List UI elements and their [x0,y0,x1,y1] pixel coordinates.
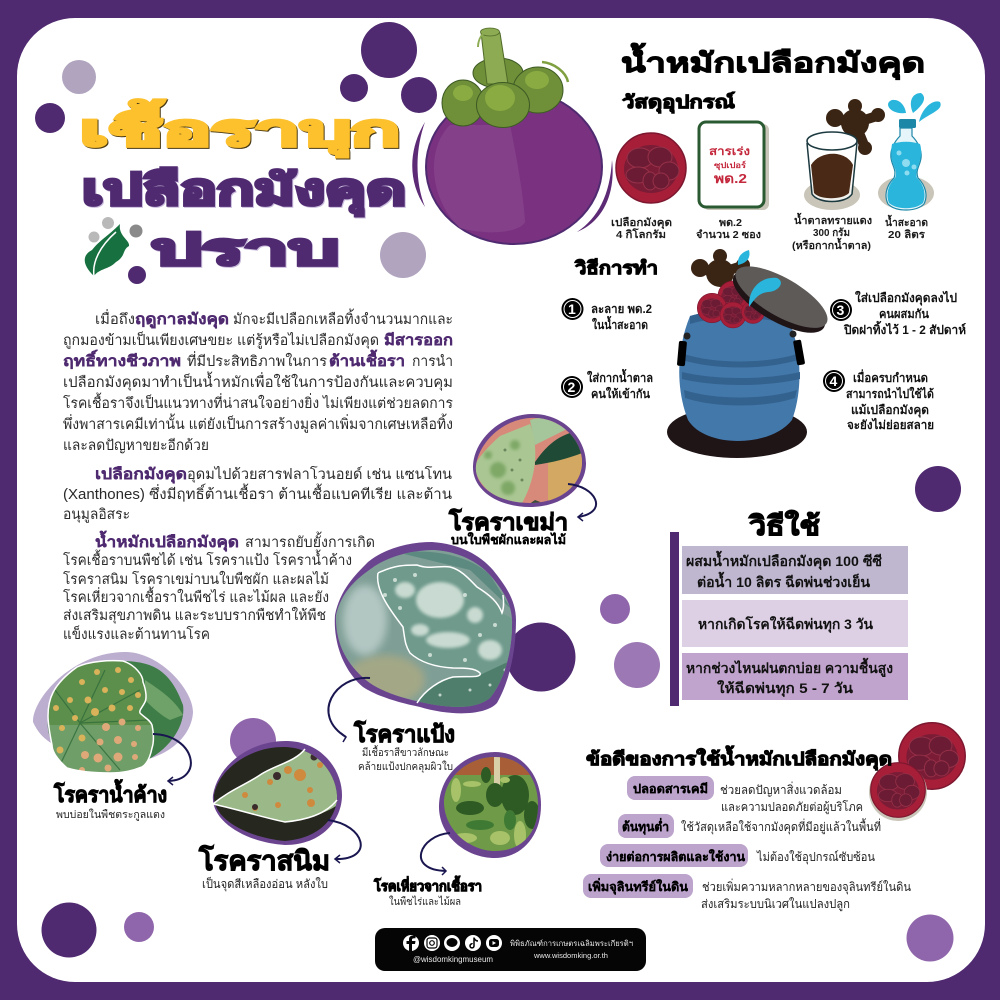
material: mangosteen peel: เปลือกมังคุด [611,216,672,230]
material: PD2 packet: สารเร่ง [709,146,750,158]
disease: powdery mildew: โรคราแป้ง [353,720,455,747]
benefit 4: เพิ่มจุลินทรีย์ในดิน [588,878,688,895]
step 4: 4 [830,373,838,389]
step 3: ปิดฝาทิ้งไว้ 1 - 2 สัปดาห์ [843,320,966,337]
text block: intro paragraph: และลดปัญหาขยะอีกด้วย [63,437,209,454]
usage row 1 [682,546,908,594]
text block: intro paragraph: มักจะมีเปลือกเหลือทิ้งจำนวนมากและ [233,308,453,328]
benefit 1: และความปลอดภัยต่อผู้บริโภค [721,800,863,815]
step 4: แม้เปลือกมังคุด [851,403,929,418]
text block: fermented extract paragraph: สามารถยับยั้งการเกิด [245,531,375,551]
icon: mangosteen fruit [412,28,613,245]
text block: xanthones paragraph: (Xanthones) ซึ่งมีฤทธิ์ต้านเชื้อรา ต้านเชื้อแบคทีเรีย และต้าน [63,483,452,503]
material: mangosteen peel: 4 กิโลกรัม [616,228,666,241]
text block: fermented extract paragraph: โรคราสนิม โรคราเขม่าบนใบพืชผัก และผลไม้ [63,570,329,588]
step 3: คนผสมกัน [879,307,930,321]
disease: sooty mold: บนใบพืชผักและผลไม้ [451,532,566,547]
step 1: ละลาย พด.2 [591,302,652,316]
text block: fermented extract paragraph: ส่งเสริมสุขภาพดิน และระบบรากพืชทำให้พืช [63,606,326,624]
text block: intro paragraph: มีสารออก [384,332,453,349]
social icons [403,935,502,951]
footer bar [375,928,646,971]
material: brown sugar glass: 300 กรัม [813,227,850,239]
text block: intro paragraph: พึ่งพาสารเคมีเท่านั้น แต่ยังเป็นการสร้างมูลค่าเพิ่มจากเศษเหลือทิ้ง [63,413,453,433]
icon: fermentation barrel [667,249,836,458]
text block: fermented extract paragraph [63,530,375,643]
disease: rust: โรคราสนิม [198,844,330,876]
title: ปราบ [151,226,339,273]
panel: how to use [670,510,908,706]
benefit 1 [627,776,863,815]
text block: xanthones paragraph: เปลือกมังคุด [95,466,187,484]
disease: downy mildew: พบบ่อยในพืชตระกูลแตง [56,808,165,821]
usage row 1: ผสมน้ำหมักเปลือกมังคุด 100 ซีซี [686,550,883,570]
disease: powdery mildew: มีเชื้อราสีขาวลักษณะ [362,745,449,759]
material: PD2 packet: ซุปเปอร์ [714,160,747,171]
disease: rust [198,718,361,892]
benefit 4: ช่วยเพิ่มความหลากหลายของจุลินทรีย์ในดิน [702,878,911,895]
disease: rust: เป็นจุดสีเหลืองอ่อน หลังใบ [202,876,328,892]
benefit 4: ส่งเสริมระบบนิเวศในแปลงปลูก [701,897,850,912]
text block: xanthones paragraph [63,465,452,523]
step 2: ใส่กากน้ำตาล [587,368,653,385]
step 2: คนให้เข้ากัน [591,386,651,401]
benefit 1: ปลอดสารเคมี [633,782,708,796]
text block: fermented extract paragraph: โรคเชื้อราบนพืชได้ เช่น โรคราแป้ง โรคราน้ำค้าง [63,549,352,569]
benefit 1: ช่วยลดปัญหาสิ่งแวดล้อม [720,781,842,797]
step 2: 2 [568,379,576,395]
text block: intro paragraph: ที่มีประสิทธิภาพในการ [187,351,327,370]
icon: leaf logo [85,217,142,276]
title: เชื้อราบุก [80,99,400,157]
material: clean water bottle: น้ำสะอาด [885,214,928,229]
text block: intro paragraph: เปลือกมังคุดมาทำเป็นน้ำหมักเพื่อใช้ในการป้องกันและควบคุม [63,371,453,391]
usage row 3: หากช่วงไหนฝนตกบ่อย ความชื้นสูง [686,657,893,677]
step 4: สามารถนำไปใช้ได้ [846,386,934,401]
text block: intro paragraph [63,308,453,454]
disease: fungal wilt: โรคเหี่ยวจากเชื้อรา [373,875,482,894]
material: PD2 packet: จำนวน 2 ซอง [696,229,761,241]
heading: materials: วัสดุอุปกรณ์ [622,91,735,114]
usage row 1: ต่อน้ำ 10 ลิตร ฉีดพ่นช่วงเย็น [697,571,870,590]
text block: xanthones paragraph: อุดมไปด้วยสารฟลาโวนอยด์ เช่น แซนโทน [187,465,452,483]
benefit 2 [618,814,881,838]
footer bar: พิพิธภัณฑ์การเกษตรเฉลิมพระเกียรติฯ [510,939,633,948]
disease: downy mildew: โรคราน้ำค้าง [53,779,167,807]
material: PD2 packet: พด.2 [719,217,742,229]
text block: intro paragraph: เมื่อถึง [95,309,135,328]
disease: downy mildew [33,652,193,821]
material: brown sugar glass: (หรือกากน้ำตาล) [792,237,871,252]
title: เปลือกมังคุด [82,166,406,216]
text block: intro paragraph: การนำ [412,354,453,370]
step 3: 3 [836,302,844,318]
step 1 [562,298,652,332]
text block: intro paragraph: ต้านเชื้อรา [329,349,405,370]
text block: intro paragraph: โรคเชื้อราจึงเป็นแนวทางที่น่าสนใจอย่างยิ่ง ไม่เพียงแต่ช่วยลดการ [63,392,453,412]
disease: sooty mold: โรคราเขม่า [448,508,568,535]
disease: fungal wilt: ในพืชไร่และไม้ผล [389,895,461,908]
benefit 3: ง่ายต่อการผลิตและใช้งาน [606,849,745,864]
material: clean water bottle: 20 ลิตร [888,229,925,241]
step 2 [561,368,653,401]
usage row 2: หากเกิดโรคให้ฉีดพ่นทุก 3 วัน [698,615,873,633]
heading: how to use: วิธีใช้ [748,510,820,541]
disease: sooty mold [448,410,596,547]
heading: benefits: ข้อดีของการใช้น้ำหมักเปลือกมังคุด [586,745,892,771]
material: brown sugar glass [792,99,885,252]
benefit 4 [583,874,911,912]
benefit 3 [600,844,875,867]
material: clean water bottle [878,93,941,241]
title [80,99,406,273]
text block: fermented extract paragraph: น้ำหมักเปลือกมังคุด [95,530,239,552]
material: mangosteen peel [611,133,686,241]
footer bar: @wisdomkingmuseum [413,954,493,964]
heading: fermented peel: น้ำหมักเปลือกมังคุด [621,42,925,80]
text block: xanthones paragraph: อนุมูลอิสระ [63,507,130,523]
step 4 [823,369,934,432]
material: PD2 packet [696,122,769,241]
material: brown sugar glass: น้ำตาลทรายแดง [794,212,872,227]
step 3: ใส่เปลือกมังคุดลงไป [855,290,957,306]
step 4: เมื่อครบกำหนด [853,369,928,385]
disease: powdery mildew [328,530,520,773]
text block: fermented extract paragraph: แข็งแรงและต้านทานโรค [63,624,210,643]
benefit 2: ใช้วัสดุเหลือใช้จากมังคุดที่มีอยู่แล้วในพื้นที่ [681,818,881,835]
material: PD2 packet: พด.2 [714,171,747,186]
usage row 3 [682,653,908,700]
usage row 2 [682,600,908,647]
icon: mangosteen slices [869,723,965,821]
disease: fungal wilt [373,750,545,908]
heading: method: วิธีการทำ [574,258,658,278]
text block: intro paragraph: ถูกมองข้ามเป็นเพียงเศษขยะ แต่รู้หรือไม่เปลือกมังคุด [63,330,379,349]
text block: intro paragraph: ฤทธิ์ทางชีวภาพ [63,349,181,370]
step 1: 1 [568,301,576,317]
step 4: จะยังไม่ย่อยสลาย [847,417,934,432]
usage row 3: ให้ฉีดพ่นทุก 5 - 7 วัน [717,679,853,697]
step 3 [830,290,966,337]
footer bar: www.wisdomking.or.th [533,951,608,960]
benefit 3: ไม่ต้องใช้อุปกรณ์ซับซ้อน [756,850,875,865]
text block: fermented extract paragraph: โรคเหี่ยวจากเชื้อราในพืชไร่ และไม้ผล และยัง [63,586,329,606]
disease: powdery mildew: คล้ายแป้งปกคลุมผิวใบ [358,760,453,773]
text block: intro paragraph: ฤดูกาลมังคุด [135,311,229,329]
step 1: ในน้ำสะอาด [592,315,648,332]
benefit 2: ต้นทุนต่ำ [622,818,669,835]
panel: benefits [583,745,911,912]
